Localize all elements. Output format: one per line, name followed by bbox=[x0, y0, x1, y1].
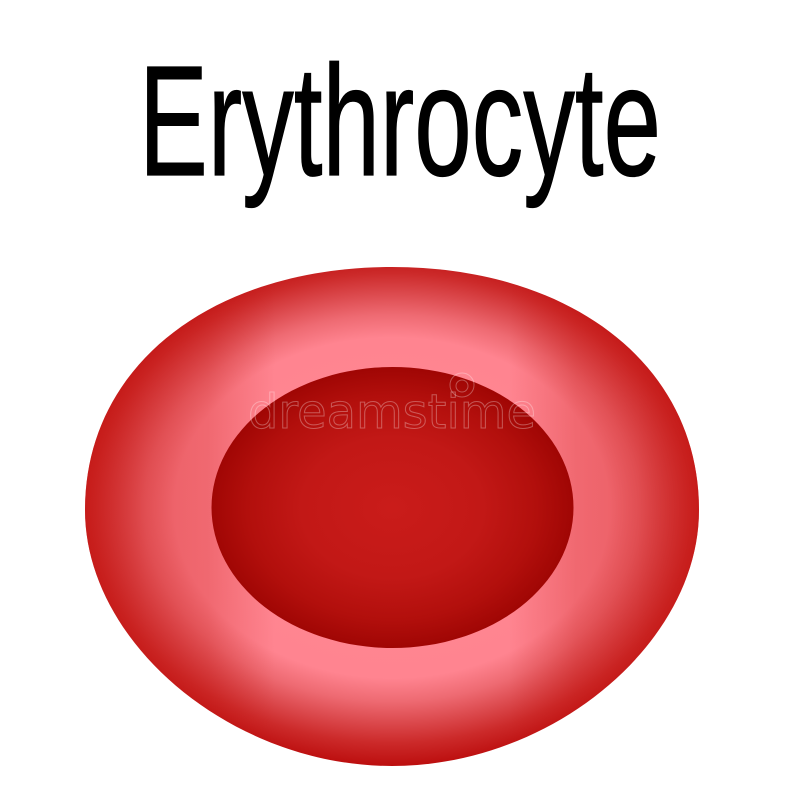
cell side shading bbox=[85, 267, 699, 766]
cell central depression bbox=[212, 367, 574, 648]
watermark bbox=[248, 373, 536, 440]
watermark wordmark: dreamstime bbox=[248, 385, 536, 440]
red blood cell illustration bbox=[85, 267, 699, 766]
watermark logo bbox=[450, 373, 474, 397]
cell outer body bbox=[85, 267, 699, 766]
